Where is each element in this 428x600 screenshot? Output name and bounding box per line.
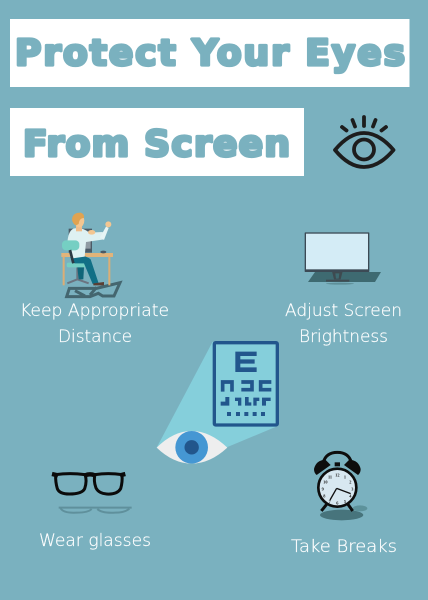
numerals: 9 bbox=[322, 487, 324, 492]
label: keep appropriate distance: Keep Appropriate bbox=[20, 301, 169, 321]
numerals: 3 bbox=[351, 487, 354, 492]
icon: glasses bbox=[52, 474, 132, 513]
central illustration: eye and eye chart bbox=[157, 342, 279, 464]
screen bbox=[305, 232, 369, 272]
numerals: 5 bbox=[344, 499, 346, 504]
label: adjust screen brightness: Adjust Screen bbox=[285, 301, 402, 321]
handle and bells bbox=[323, 452, 351, 462]
icon: person at desk bbox=[61, 213, 120, 297]
feet bbox=[321, 504, 353, 511]
label: wear glasses: Wear glasses bbox=[39, 531, 151, 551]
hands and head bbox=[105, 221, 111, 227]
icon: alarm clock bbox=[314, 452, 367, 520]
eye chart bbox=[214, 343, 277, 425]
label: keep appropriate distance bbox=[20, 301, 169, 347]
shadow bbox=[308, 272, 381, 282]
label: adjust screen brightness: Brightness bbox=[299, 327, 388, 347]
label: take breaks: Take Breaks bbox=[291, 537, 397, 557]
numerals: 11 bbox=[328, 474, 332, 479]
numerals: 1 bbox=[344, 474, 346, 479]
title line 1 bbox=[10, 19, 410, 87]
title line 1: Protect Your Eyes bbox=[15, 33, 405, 74]
hands bbox=[330, 488, 351, 500]
numerals: 2 bbox=[349, 480, 351, 485]
chair back bbox=[62, 240, 79, 250]
frames bbox=[52, 474, 125, 494]
title line 2 bbox=[10, 108, 304, 176]
face bbox=[318, 469, 356, 507]
torso and arm bbox=[67, 228, 104, 259]
sight cone bbox=[157, 342, 279, 448]
chair base bbox=[67, 267, 89, 283]
shadow bbox=[320, 510, 363, 520]
eye bbox=[157, 431, 227, 464]
numerals: 7 bbox=[329, 499, 332, 504]
numerals bbox=[322, 472, 354, 506]
numerals: 4 bbox=[349, 494, 352, 499]
monitor bbox=[69, 229, 92, 253]
icon: eye with lashes bbox=[335, 117, 394, 167]
shadow bbox=[67, 283, 120, 297]
title line 2: From Screen bbox=[23, 124, 290, 165]
numerals: 10 bbox=[323, 480, 327, 485]
chair seat bbox=[67, 263, 89, 267]
reflection bbox=[59, 508, 132, 513]
label: adjust screen brightness bbox=[285, 301, 402, 347]
stand bbox=[332, 271, 343, 279]
numerals: 12 bbox=[335, 472, 339, 477]
legs bbox=[70, 256, 99, 284]
label: keep appropriate distance: Distance bbox=[58, 327, 132, 347]
desk bbox=[61, 253, 113, 257]
numerals: 8 bbox=[323, 494, 326, 499]
icon: monitor bbox=[305, 232, 381, 285]
numerals: 6 bbox=[336, 501, 339, 506]
